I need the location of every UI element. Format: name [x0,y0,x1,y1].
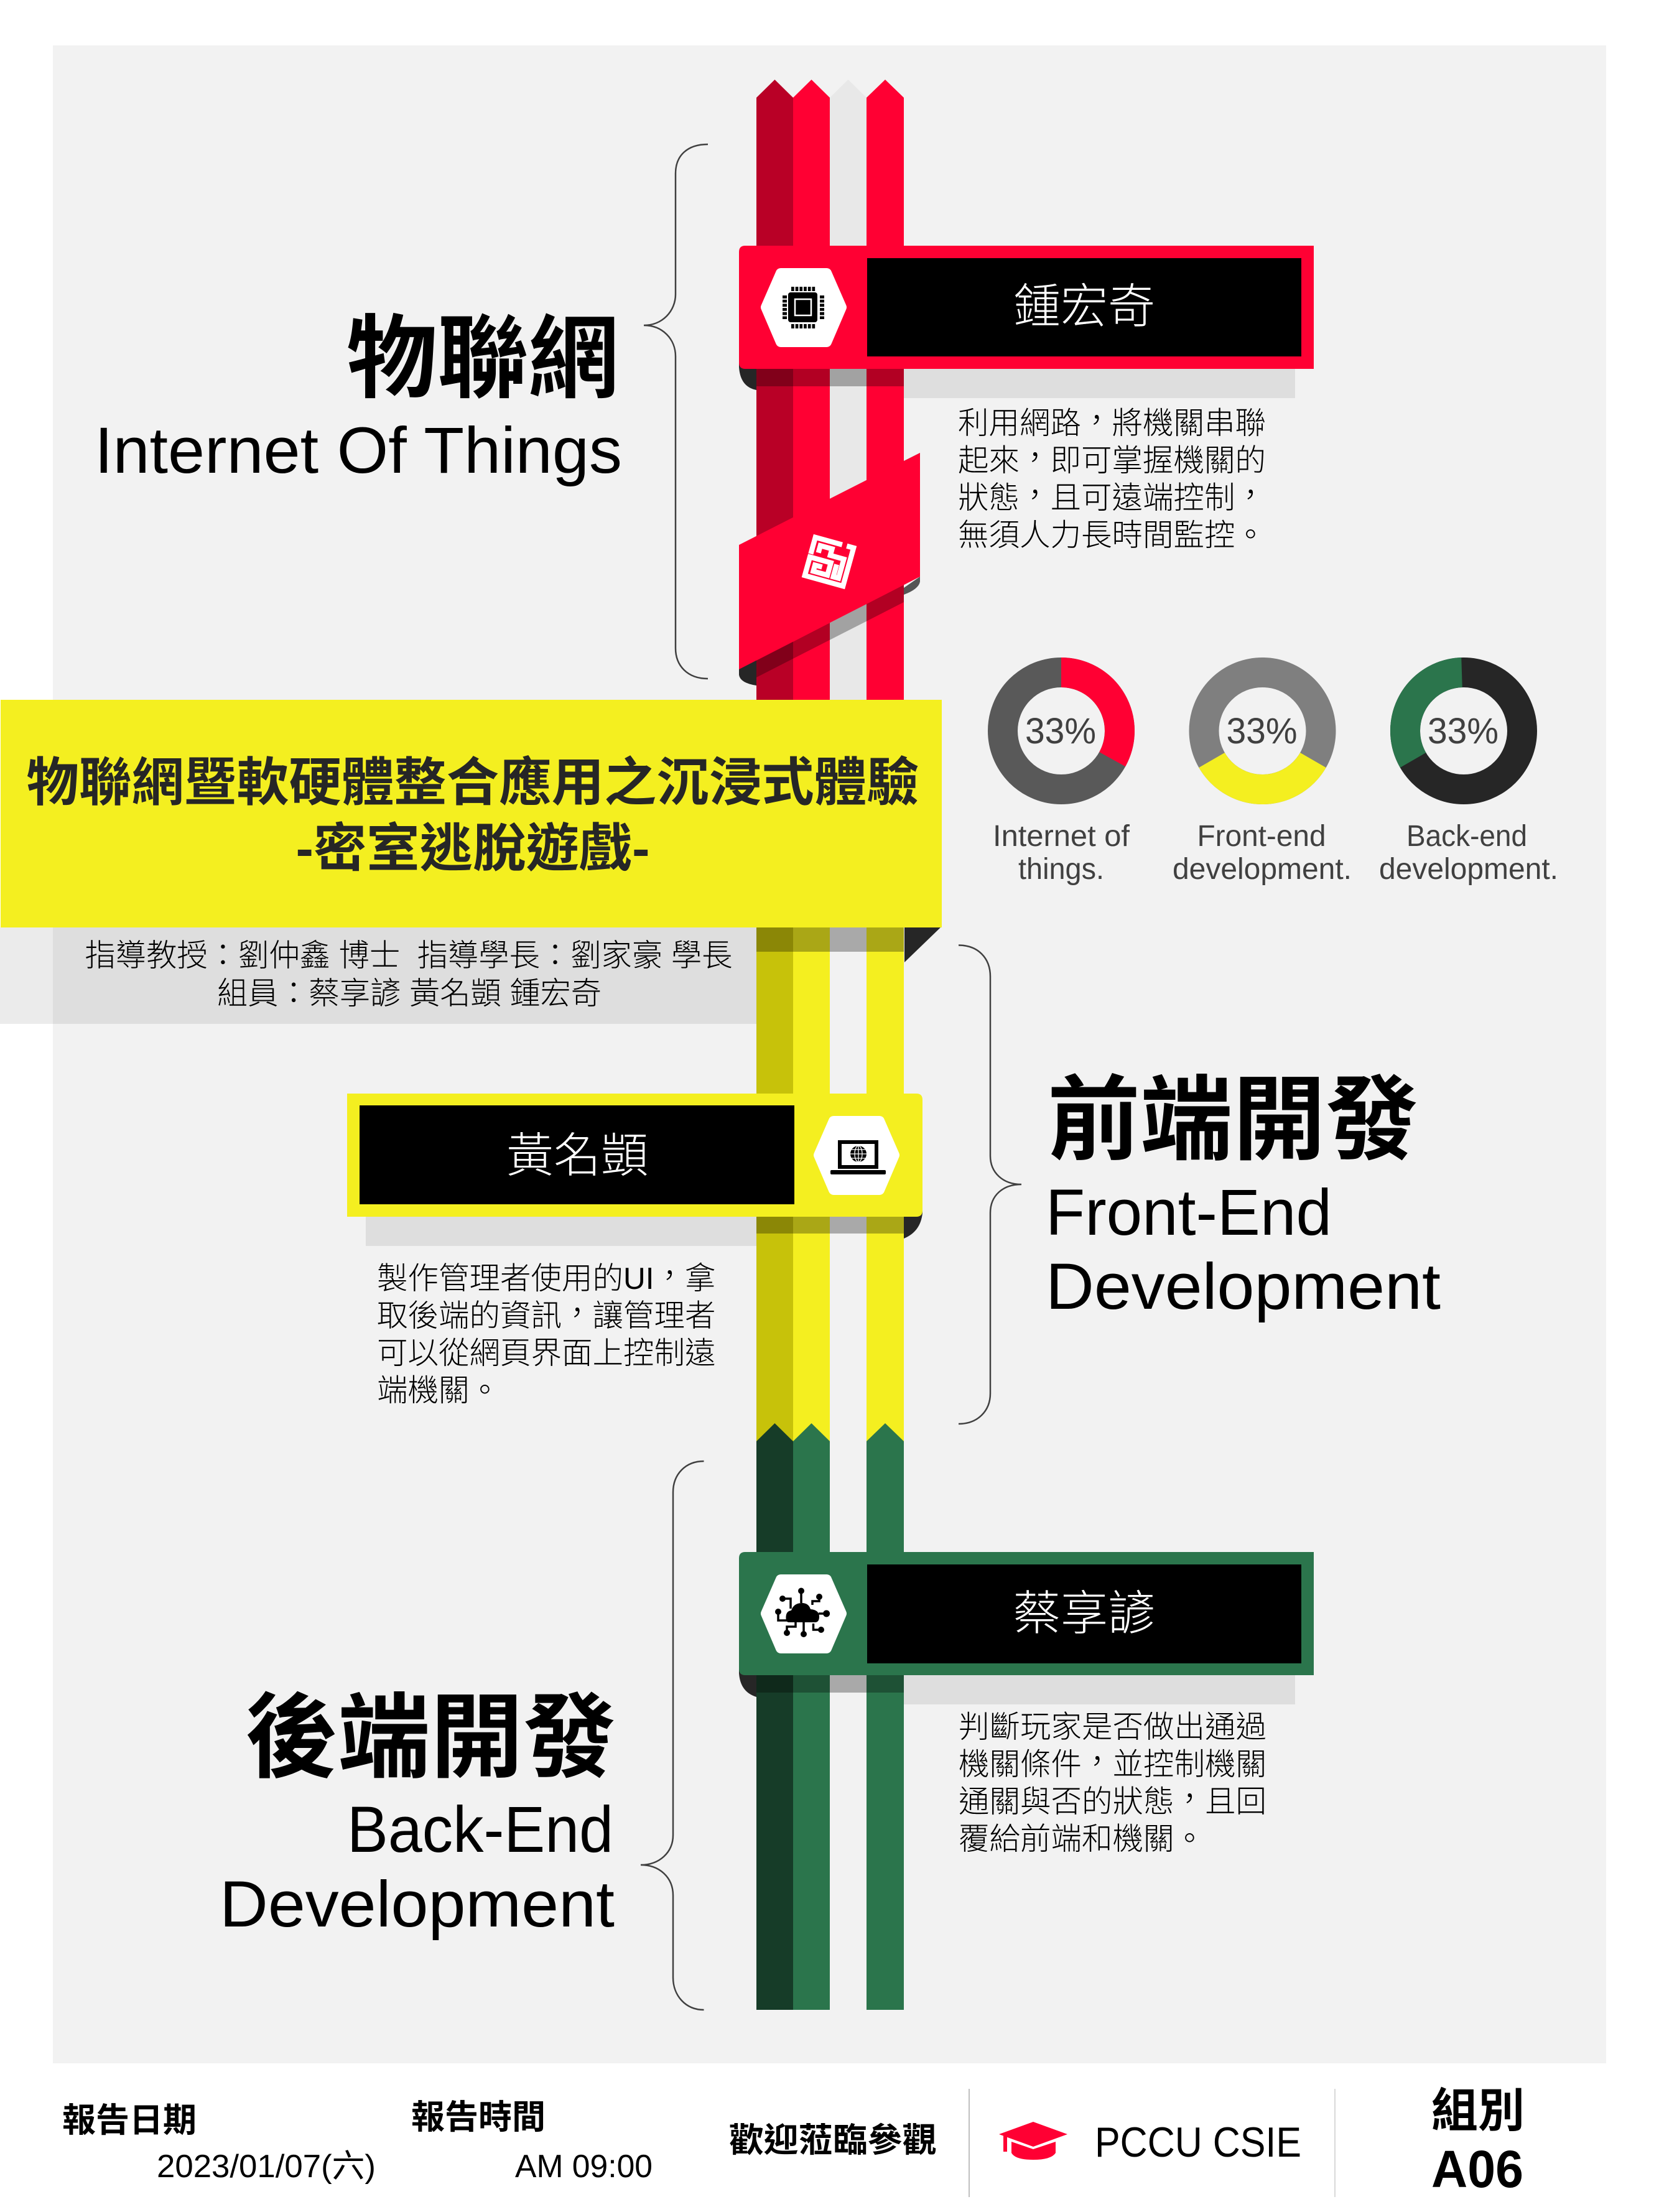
description: front-end: ， [654,1259,685,1293]
advisors and members [85,938,733,1011]
footer: report time [411,2089,653,2185]
icon: laptop with globe [819,1121,895,1190]
member name: 蔡享諺: 蔡享諺 [1013,1575,1155,1643]
icon: graduation cap [999,2122,1067,2160]
description: back-end: ， [1174,1782,1205,1816]
brace: back-end [641,1461,704,2010]
footer: welcome: 歡迎蒞臨參觀 [729,2112,937,2162]
donut chart: back-end: 33% [1428,711,1499,751]
description: internet of things: 且可遠端控制 [1050,481,1235,515]
description: back-end: 且回 [1205,1785,1266,1819]
heading: front-end development: Development [1046,1250,1441,1323]
description: back-end: 機關條件 [959,1747,1082,1782]
description: front-end [377,1259,715,1408]
yellow stripes [756,921,904,1442]
icon: maze logo [805,537,853,586]
description: front-end: 可以從網頁界面上控制遠 [377,1336,715,1370]
description: internet of things: ， [1020,478,1050,513]
description: internet of things: 將機關串聯 [1112,406,1266,440]
donut labels: development. [1173,853,1352,886]
description: internet of things: ， [1081,404,1112,438]
member name: 黃名顗: 黃名顗 [506,1117,648,1186]
title text: 物聯網暨軟硬體整合應用之沉浸式體驗 [26,753,919,812]
heading: internet of things: 物聯網 [346,286,619,417]
heading: front-end development [1046,1044,1441,1323]
heading: back-end development: Development [220,1868,615,1941]
description: front-end: ， [562,1296,592,1331]
panel: member red [739,246,1314,398]
heading: back-end development: Back-End [347,1793,613,1866]
donut chart: internet of things [1003,672,1120,789]
heading: front-end development: 前端開發 [1048,1044,1418,1179]
footer: report time: 報告時間 [411,2089,546,2139]
advisors and members: 組員：蔡享諺 黃名顗 鍾宏奇 [217,976,602,1011]
ribbon with logo [739,453,920,685]
donut labels: Front-end [1197,820,1326,853]
donut labels: development. [1379,853,1558,886]
title banner shadow band [0,927,941,1024]
description: internet of things: 起來 [958,444,1020,478]
donut labels [993,820,1558,886]
donut chart: internet of things: 33% [1025,711,1096,751]
donut labels: Internet of [993,820,1130,853]
brace: front-end [959,946,1021,1424]
heading: internet of things: Internet Of Things [95,414,622,487]
description: front-end: 拿 [685,1262,715,1296]
heading: back-end development: 後端開發 [245,1662,616,1796]
donut chart: front-end [1204,672,1321,789]
icon: cloud network [766,1579,842,1648]
description: internet of things: 無須人力長時間監控。 [958,518,1266,552]
green stripes [756,1423,904,2010]
panel: member green [739,1552,1314,1704]
red stripes [756,80,904,709]
footer: group number: A06 [1431,2140,1523,2198]
description: back-end [959,1710,1266,1856]
panel: member yellow [347,1094,922,1246]
description: front-end: 讓管理者 [592,1299,715,1333]
title text: -密室逃脫遊戲- [296,819,649,878]
heading: internet of things [95,286,622,487]
description: back-end: 覆給前端和機關。 [959,1822,1205,1856]
donut labels: Back-end [1406,820,1527,853]
donut chart: front-end: 33% [1227,711,1298,751]
footer: report date [62,2093,376,2185]
description: back-end: ， [1082,1745,1112,1779]
footer: report date: 2023/01/07(六) [157,2149,376,2185]
member name: 鍾宏奇: 鍾宏奇 [1013,268,1155,337]
footer: department name: PCCU CSIE [1095,2119,1301,2166]
description: front-end: 製作管理者使用的UI [377,1262,654,1296]
description: back-end: 判斷玩家是否做出通過 [959,1710,1266,1744]
title text [26,753,919,878]
heading: back-end development [220,1662,616,1941]
description: internet of things: ， [1235,478,1266,513]
brace: internet of things [644,144,708,679]
advisors and members: 指導教授：劉仲鑫 博士 指導學長：劉家豪 學長 [85,938,733,973]
description: internet of things: ， [1020,441,1050,475]
icon: chip [766,273,842,342]
description: internet of things: 利用網路 [958,406,1081,440]
footer: group number [1431,2073,1525,2198]
description: front-end: 取後端的資訊 [377,1299,562,1333]
description: internet of things: 即可掌握機關的 [1050,444,1266,478]
description: front-end: 端機關。 [377,1373,500,1408]
donut labels: things. [1018,853,1104,886]
heading: front-end development: Front-End [1046,1176,1332,1249]
title banner [1,700,942,927]
donut chart: back-end [1405,672,1522,789]
description: internet of things [958,404,1266,552]
footer: report time: AM 09:00 [515,2149,653,2185]
description: back-end: 並控制機關 [1112,1747,1266,1782]
footer: group number: 組別 [1431,2073,1525,2140]
footer: report date: 報告日期 [62,2093,197,2142]
description: back-end: 通關與否的狀態 [959,1785,1174,1819]
description: internet of things: 狀態 [958,481,1020,515]
